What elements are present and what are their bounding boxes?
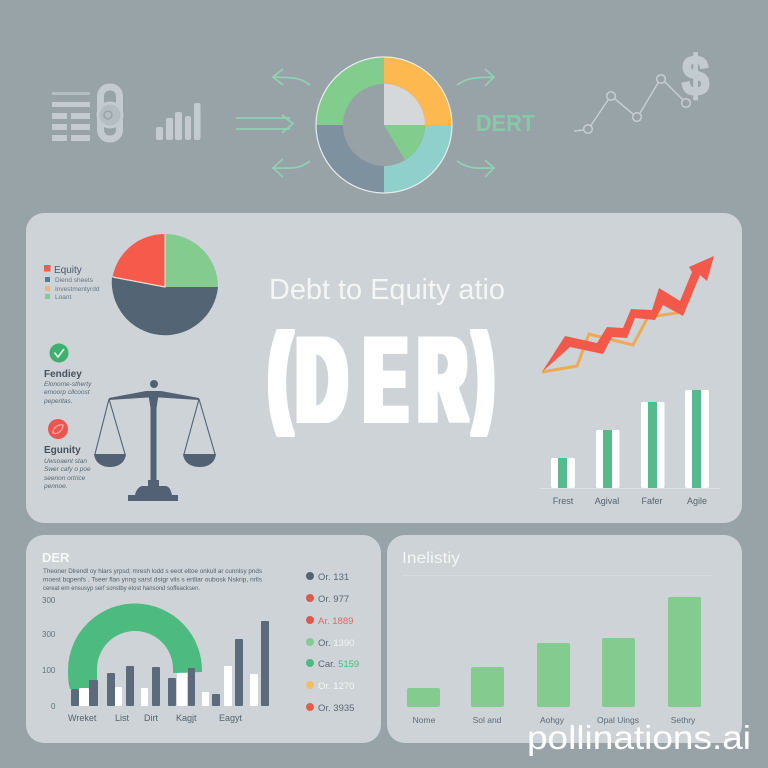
green arch [68, 604, 202, 689]
legend: der: Or. 977 [318, 594, 349, 605]
text block: der description: Theoner Dlrendl oy hlars yrpsd; mresh lodd s eeot eltoe onkull ar cunnlsy pnds [43, 568, 263, 575]
x axis labels: List [115, 713, 130, 723]
icon: leaf [48, 419, 68, 439]
bar chart: white and green: Agival [595, 496, 619, 506]
heading: der: DER [42, 550, 70, 565]
x axis labels: Nome [413, 715, 436, 725]
panel: main: ) [475, 312, 492, 436]
axis labels [42, 596, 56, 711]
text block: equity: Egunity [44, 445, 81, 456]
title: (DER): R [419, 313, 466, 447]
panel: industry chart [387, 535, 742, 743]
axis labels: 300 [42, 596, 56, 605]
text block: fendiey: Fendiey [44, 369, 82, 380]
chart: rising zigzag arrow [542, 256, 714, 372]
legend: der [306, 572, 359, 714]
x axis labels: Dirt [144, 713, 158, 723]
panel: der chart [26, 535, 381, 743]
x axis labels: Eagyt [219, 713, 243, 723]
x axis labels: Sethry [671, 715, 696, 725]
text block: fendiey: peperitas. [43, 398, 73, 405]
text block: equity: pennoe. [43, 483, 68, 490]
legend: pie [44, 265, 100, 301]
bar chart: white and green: Frest [553, 496, 574, 506]
icon: signal bars [156, 103, 200, 140]
legend: der: Car. 5159 [318, 659, 359, 670]
x axis labels: Sol and [473, 715, 502, 725]
axis labels: 300 [42, 630, 56, 639]
bar chart: white and green: Agile [687, 496, 707, 506]
x axis labels: Wreket [68, 713, 97, 723]
arrow: lower left [273, 159, 310, 177]
text block: fendiey: emoorp cllcoost [44, 389, 91, 396]
icon: line chart [574, 75, 690, 133]
heading: industry: Inelistiy [402, 550, 460, 567]
legend: pie: Diend sheets [55, 277, 94, 284]
legend: der: Or. 1390 [318, 638, 354, 649]
icon: table and chain [52, 87, 122, 141]
x axis labels: Kagjt [176, 713, 197, 723]
arrow: lower right [457, 160, 494, 177]
title: (DER): ( [270, 312, 290, 436]
label: debt: DERT [476, 110, 535, 136]
arrow: upper left [273, 69, 310, 85]
legend: der: Ar. 1889 [318, 616, 353, 627]
bar chart: green [407, 597, 701, 707]
title: (DER): D [297, 313, 346, 447]
axis labels: 0 [51, 702, 56, 711]
title: (DER) [270, 312, 492, 447]
text block: fendiey: Elonome-stherty [44, 381, 92, 388]
watermark: pollinations.ai [527, 719, 751, 756]
legend: der: Or. 131 [318, 572, 349, 583]
axis labels: 100 [42, 666, 56, 675]
x axis labels [68, 713, 243, 723]
x axis labels: Aohgy [540, 715, 565, 725]
legend: pie: Investmentyrdd [55, 286, 100, 293]
text block: equity: seenon ortrice [44, 475, 86, 482]
icon: dollar sign: $ [682, 44, 709, 107]
legend: pie: Loant [55, 294, 71, 301]
text block: fendiey [43, 369, 92, 405]
x axis labels: Opal Uings [597, 715, 639, 725]
text block: der description: cereat ern ensusyp serf sonstby etost hansond soffeacksen. [43, 585, 200, 592]
icon: balance scale [94, 380, 216, 501]
subtitle: Debt to Equity atio [269, 274, 505, 306]
arrow: double right arrow [236, 115, 293, 133]
text block: equity: Swer cafy o poe [44, 466, 91, 473]
bar chart: slate and white [71, 621, 269, 706]
text block: der description [43, 568, 263, 592]
icon: check [50, 344, 68, 362]
legend: der: Or. 3935 [318, 703, 354, 714]
arrow: upper right [457, 69, 494, 86]
title: (DER): E [365, 313, 406, 447]
panel: main [26, 213, 742, 523]
text block: equity: Uwsoaent stan [44, 458, 87, 465]
x axis labels [413, 715, 696, 725]
bar chart: white and green: Fafer [641, 496, 663, 506]
legend: pie: Equity [54, 265, 82, 276]
pie chart [112, 234, 218, 335]
text block: der description: moest bqpenfs . Tseer flan ynng sarst dstgr vils s ertliar oubosk Nskrip, nrlls [43, 576, 263, 584]
legend: der: Or. 1270 [318, 681, 354, 692]
text block: equity [43, 445, 91, 490]
bar chart: white and green [540, 390, 720, 506]
donut chart [316, 57, 452, 193]
